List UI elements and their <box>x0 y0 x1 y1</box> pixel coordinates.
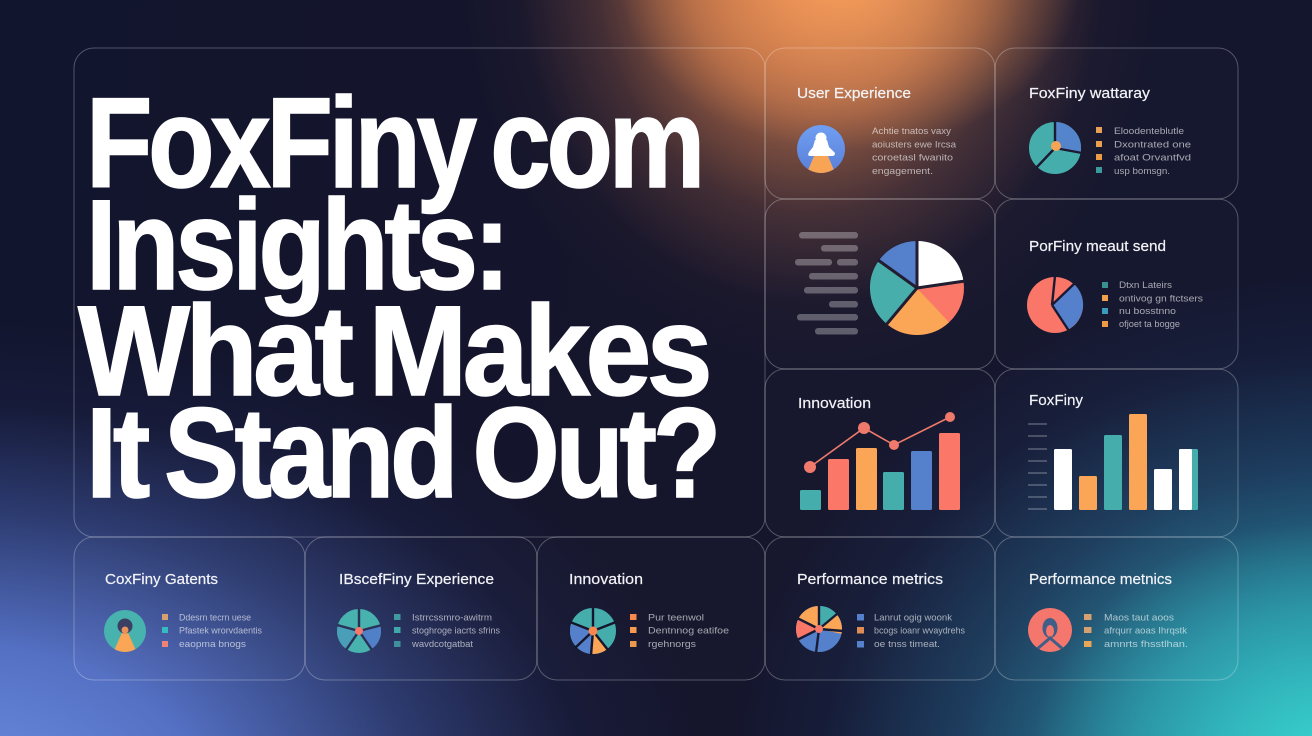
legend: ofjoet ta bogge <box>1119 319 1180 330</box>
line chart <box>804 412 955 473</box>
panel: main title <box>74 48 765 537</box>
text block <box>872 126 957 177</box>
title: Insights: <box>86 174 506 317</box>
title: What Makes <box>78 280 708 423</box>
legend <box>1084 612 1188 650</box>
pie chart <box>337 608 382 650</box>
heading: IBscefFiny Experience <box>339 571 494 588</box>
legend: Dtxn Lateirs <box>1119 280 1172 291</box>
legend <box>630 612 729 650</box>
panel: large pie chart <box>765 199 995 369</box>
panel: porfiny pie legend <box>995 199 1238 369</box>
legend: afoat Orvantfvd <box>1114 152 1191 164</box>
panel: bscef experience <box>305 537 537 680</box>
title: FoxFiny com <box>86 72 701 215</box>
panel: innovation <box>765 369 995 537</box>
legend: Eloodenteblutle <box>1114 126 1184 137</box>
heading: Performance metrics <box>797 571 943 588</box>
panel: performance metrics pie <box>765 537 995 680</box>
legend: bcogs ioanr wvaydrehs <box>874 626 965 636</box>
icon: avatar <box>104 610 146 655</box>
legend: oe tnss timeat. <box>874 639 940 650</box>
heading: PorFiny meaut send <box>1029 238 1166 255</box>
bar chart <box>1054 414 1198 510</box>
panel: coxfiny students <box>74 537 305 680</box>
list bars <box>795 232 858 334</box>
bar chart <box>800 433 960 510</box>
title: It Stand Out? <box>86 382 717 525</box>
legend: Dxontrated one <box>1114 140 1191 150</box>
legend: afrqurr aoas Ihrqstk <box>1104 626 1187 636</box>
pie chart <box>570 607 616 655</box>
heading: Performance metnics <box>1029 571 1172 588</box>
panel: innovation pie <box>537 537 765 680</box>
legend: Pfastek wrorvdaentis <box>179 626 262 636</box>
text block: coroetasl fwanito <box>872 152 953 164</box>
legend <box>162 612 262 650</box>
legend: Istrrcssmro-awitrm <box>412 612 492 624</box>
axis ticks <box>1028 424 1047 509</box>
heading: User Experience <box>797 85 911 102</box>
legend: wavdcotgatbat <box>411 639 473 650</box>
legend: Maos taut aoos <box>1104 612 1174 624</box>
legend: ontivog gn ftctsers <box>1119 294 1203 304</box>
panel: performance metrics avatar <box>995 537 1238 680</box>
legend: nu bosstnno <box>1119 306 1176 317</box>
legend: stoghroge iacrts sfrins <box>412 626 500 636</box>
pie chart <box>878 240 965 325</box>
legend <box>857 612 965 650</box>
infographic <box>74 48 1238 680</box>
text block: aoiusters ewe Ircsa <box>872 140 957 150</box>
legend: rgehnorgs <box>648 639 696 650</box>
heading: FoxFiny wattaray <box>1029 85 1151 102</box>
panel: foxfiny bars <box>995 369 1238 537</box>
pie chart <box>1036 121 1082 168</box>
legend: Pur teenwol <box>648 612 704 624</box>
pie chart <box>1027 276 1083 333</box>
panel: foxfiny pie legend <box>995 48 1238 199</box>
heading: FoxFiny <box>1029 392 1084 409</box>
heading: Innovation <box>798 395 871 412</box>
pie chart <box>797 605 843 653</box>
panel: user experience <box>765 48 995 199</box>
title <box>78 72 717 525</box>
legend: usp bomsgn. <box>1114 166 1170 177</box>
legend: Ddesrn tecrn uese <box>179 612 251 624</box>
legend: amnrts fhsstlhan. <box>1104 639 1188 650</box>
icon: avatar <box>1028 608 1072 652</box>
text block: engagement. <box>872 166 933 177</box>
legend: Lanrut ogig woonk <box>874 612 952 624</box>
icon: avatar <box>797 125 845 175</box>
heading: Innovation <box>569 571 643 588</box>
legend <box>394 612 500 650</box>
legend <box>1096 126 1191 177</box>
text block: Achtie tnatos vaxy <box>872 126 951 137</box>
legend: Dentnnog eatifoe <box>648 626 729 636</box>
legend: eaopma bnogs <box>179 639 246 650</box>
heading: CoxFiny Gatents <box>105 571 218 588</box>
legend <box>1102 280 1203 330</box>
